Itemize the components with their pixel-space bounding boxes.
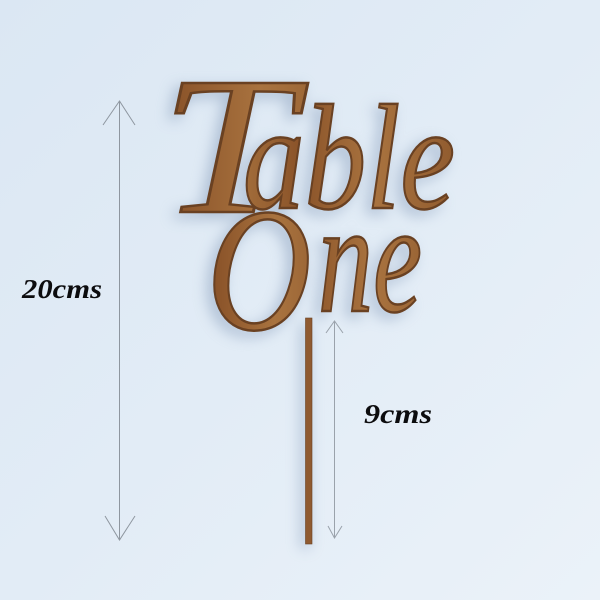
shadow of topper: able [237, 80, 449, 246]
shadow of topper [154, 41, 449, 547]
word: Table: able [243, 75, 455, 241]
label: 20cms: 20cms [21, 274, 102, 304]
shadow of topper: O [201, 178, 305, 372]
word: Table: T [160, 36, 309, 255]
arrow: 9cms dimension [326, 321, 343, 538]
word: Table [160, 36, 455, 255]
stick [306, 318, 312, 544]
word: One: ne [318, 171, 422, 346]
shadow of topper: T [154, 41, 303, 260]
label: 9cms: 9cms [364, 399, 432, 429]
word: One: O [207, 173, 311, 367]
wooden topper [160, 36, 455, 544]
arrow: 20cms dimension [103, 101, 135, 540]
shadow of topper: ne [312, 176, 416, 351]
word: One [207, 171, 422, 367]
